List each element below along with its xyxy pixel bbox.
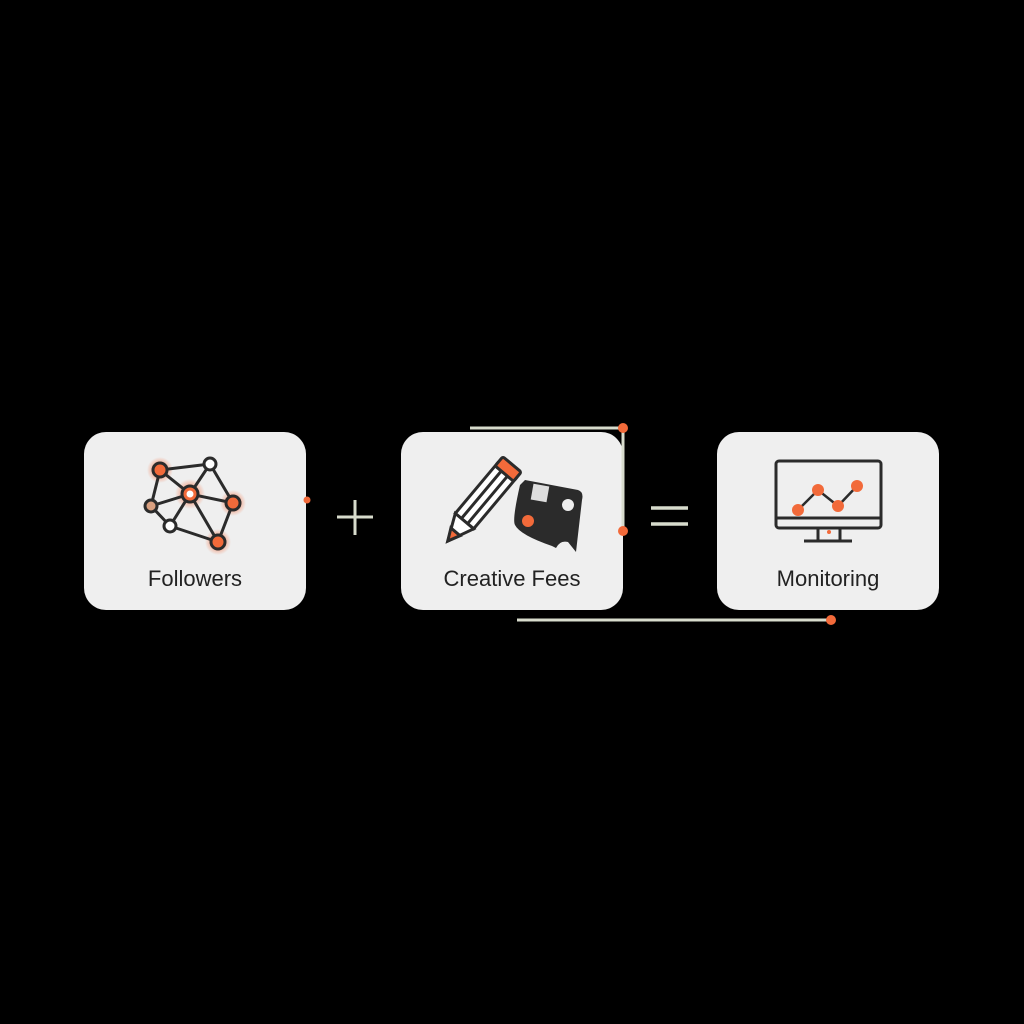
label: followers: Followers [148, 566, 242, 591]
operator: equals [651, 508, 688, 524]
card: monitoring [717, 432, 939, 610]
connector lines [470, 428, 831, 620]
icon: network [145, 457, 246, 555]
icon: pencil and palette [439, 457, 582, 552]
card: followers [84, 432, 306, 610]
connector dots [304, 423, 836, 625]
label: creative fees: Creative Fees [444, 566, 580, 591]
icon: monitor chart [776, 461, 881, 541]
operator: plus [337, 500, 373, 535]
label: monitoring: Monitoring [777, 566, 879, 591]
card: creative fees [401, 432, 623, 610]
